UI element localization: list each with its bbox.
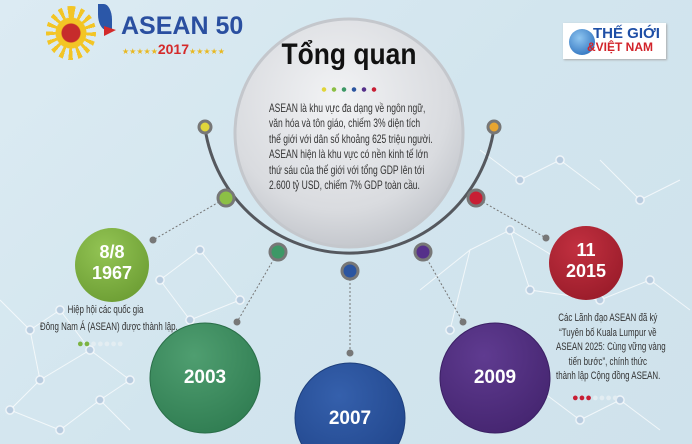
logo: ASEAN 50: ASEAN 50 bbox=[121, 12, 243, 40]
arc nodes bbox=[199, 121, 500, 279]
text: overview bbox=[269, 101, 433, 192]
caption: 2015: ASEAN 2025: Cùng vững vàng bbox=[556, 341, 666, 353]
milestone: 2015 bbox=[566, 240, 606, 281]
text: overview: ASEAN hiện là khu vực có nền kinh tế lớn bbox=[269, 147, 428, 161]
milestone: 2015: 2015 bbox=[566, 261, 606, 281]
milestone: 2007: 2007 bbox=[329, 408, 371, 429]
milestone: 1967 bbox=[92, 242, 132, 283]
milestone: 2015: 11 bbox=[576, 240, 596, 260]
logo: The Gioi & Viet Nam: THẾ GIỚI bbox=[593, 25, 660, 42]
caption: 2015: thành lập Cộng đồng ASEAN. bbox=[556, 370, 660, 382]
logo: The Gioi & Viet Nam bbox=[563, 23, 666, 59]
logo: The Gioi & Viet Nam: &VIỆT NAM bbox=[587, 40, 653, 54]
caption: 2015 bbox=[556, 312, 666, 382]
text: overview: văn hóa và tôn giáo, chiếm 3% diện tích bbox=[269, 116, 420, 130]
caption: 2015: “Tuyên bố Kuala Lumpur về bbox=[559, 326, 657, 338]
dots 1967: ●●●●●●● bbox=[77, 338, 124, 350]
icon: bird bbox=[98, 4, 112, 30]
milestone: 1967: 1967 bbox=[92, 263, 132, 283]
logo: ASEAN 50 bbox=[46, 4, 243, 60]
color dots bbox=[319, 87, 379, 92]
caption: 1967 bbox=[40, 304, 178, 333]
text: overview: thứ sáu của thế giới với tổng GDP lên tới bbox=[269, 163, 424, 177]
timeline circles bbox=[75, 228, 149, 302]
text: overview: 2.600 tỷ USD, chiếm 7% GDP toàn cầu. bbox=[269, 178, 420, 192]
arc bbox=[205, 128, 494, 253]
logo: ASEAN 50: ★★★★★2017★★★★★ bbox=[122, 41, 225, 57]
caption: 1967: Đông Nam Á (ASEAN) được thành lập. bbox=[40, 321, 178, 333]
dots 2015: ●●●●●●● bbox=[572, 392, 619, 404]
text: overview: thế giới với dân số khoảng 625 triệu người. bbox=[269, 132, 433, 146]
milestone: 2009: 2009 bbox=[474, 367, 516, 388]
caption: 1967: Hiệp hội các quốc gia bbox=[68, 304, 143, 316]
text: overview: ASEAN là khu vực đa dạng về ngôn ngữ, bbox=[269, 101, 425, 115]
milestone: 2003: 2003 bbox=[184, 367, 226, 388]
dotted connectors bbox=[150, 198, 550, 356]
caption: 2015: Các Lãnh đạo ASEAN đã ký bbox=[558, 312, 657, 324]
caption: 2015: tiến bước”, chính thức bbox=[569, 356, 647, 368]
milestone: 1967: 8/8 bbox=[99, 242, 125, 262]
heading: Tong quan: Tổng quan bbox=[282, 38, 416, 71]
gray circle bbox=[235, 19, 463, 247]
icon: sun emblem bbox=[46, 6, 96, 60]
